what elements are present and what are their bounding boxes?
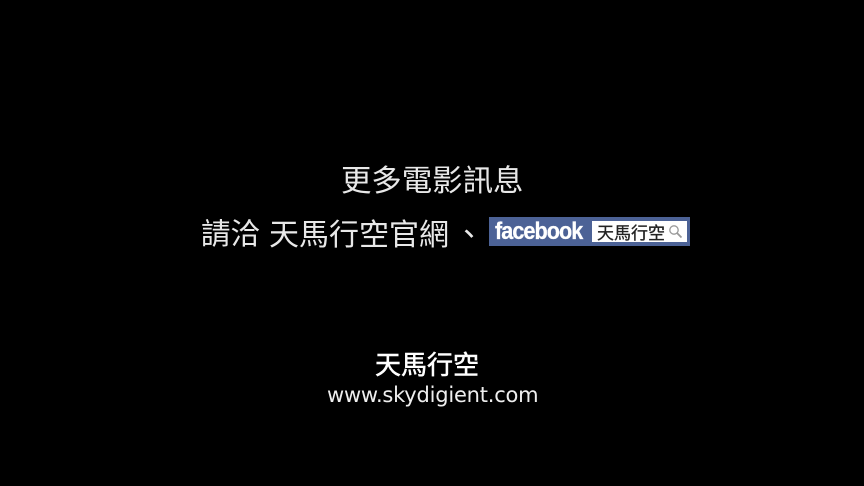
text: official site name: 天馬行空官網 — [269, 210, 449, 254]
logo: sky digital wordmark: 天馬行空 — [375, 345, 479, 382]
text: enumeration comma: 、 — [454, 210, 484, 254]
text: visit official site — [201, 210, 484, 254]
search box text: 天馬行空 — [597, 219, 665, 244]
heading: more movie info: 更多電影訊息 — [341, 156, 523, 200]
icon: magnifying glass — [669, 225, 682, 238]
facebook wordmark: facebook — [495, 218, 582, 245]
website url: www.skydigient.com — [327, 383, 538, 407]
search box — [592, 221, 687, 242]
facebook search badge — [489, 217, 690, 246]
text: please visit: 請洽 — [201, 211, 260, 253]
